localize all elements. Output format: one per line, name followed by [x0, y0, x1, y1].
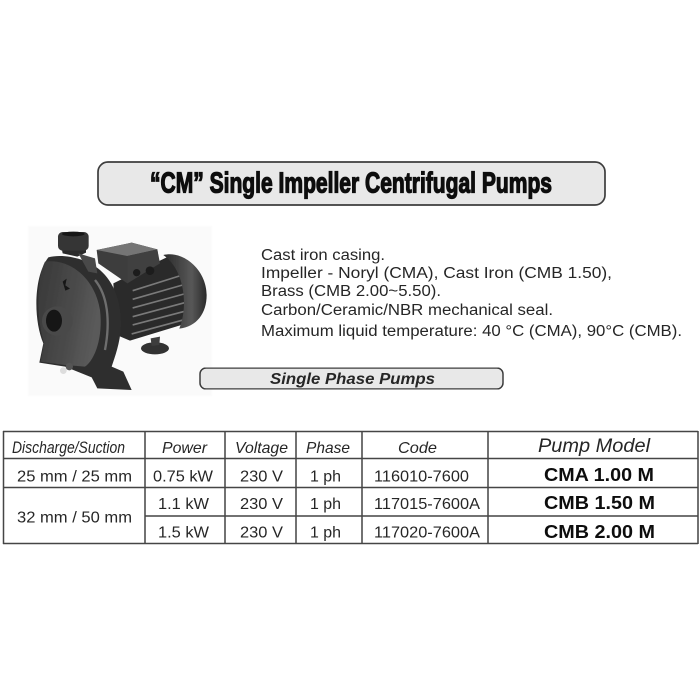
table header row: Voltage	[235, 440, 288, 457]
table header row: Pump Model	[538, 435, 651, 457]
row: CMB 2.00 M: 230 V	[240, 524, 283, 542]
title: “CM” Single Impeller Centrifugal Pumps	[150, 168, 552, 200]
row: CMB 2.00 M	[158, 522, 655, 542]
row: CMA 1.00 M: CMA 1.00 M	[544, 465, 654, 485]
row: CMA 1.00 M: 0.75 kW	[153, 468, 214, 486]
row: CMB 1.50 M: CMB 1.50 M	[544, 493, 655, 513]
row: CMB 1.50 M: 230 V	[240, 496, 283, 513]
feature list: Maximum liquid temperature: 40 °C (CMA), 90°C (CMB).	[261, 323, 682, 340]
motor foot	[141, 342, 169, 354]
row: CMB 2.00 M: 117020-7600A	[374, 524, 481, 542]
row: CMA 1.00 M: 230 V	[240, 468, 283, 486]
row: CMA 1.00 M: 25 mm / 25 mm	[17, 468, 132, 486]
table header row	[12, 435, 651, 457]
drain plug	[60, 367, 67, 374]
row: CMA 1.00 M	[17, 465, 654, 486]
table header row: Power	[162, 440, 208, 457]
logo mark	[63, 279, 70, 291]
row: CMB 2.00 M: 1 ph	[310, 524, 341, 542]
feature list	[261, 247, 682, 340]
row: CMB 2.00 M: CMB 2.00 M	[544, 522, 655, 542]
feature list: Carbon/Ceramic/NBR mechanical seal.	[261, 302, 553, 319]
table header row: Discharge/Suction	[12, 439, 125, 457]
feature list: Impeller - Noryl (CMA), Cast Iron (CMB 1.50),	[261, 265, 612, 282]
row: CMA 1.00 M: 116010-7600	[374, 468, 469, 486]
table header row: Phase	[306, 440, 350, 457]
table grid	[3, 431, 698, 544]
suction port	[42, 306, 73, 336]
motor fins	[132, 276, 185, 334]
pump photo	[28, 226, 212, 396]
row: CMB 1.50 M: 117015-7600A	[374, 496, 481, 513]
volute face	[38, 261, 101, 367]
motor end cap	[163, 254, 207, 329]
section banner: single phase pumps	[200, 368, 503, 389]
rim highlight	[95, 280, 108, 350]
row: CMB 1.50 M	[17, 493, 655, 526]
discharge port	[62, 248, 86, 257]
pump table	[3, 431, 698, 544]
row: CMA 1.00 M: 1 ph	[310, 468, 341, 486]
motor body	[113, 257, 188, 341]
row: CMB 1.50 M: 32 mm / 50 mm	[17, 510, 132, 526]
row: CMB 2.00 M: 1.5 kW	[158, 524, 210, 542]
table header row: Code	[398, 440, 437, 457]
volute outer rim	[36, 256, 132, 390]
row: CMB 1.50 M: 1.1 kW	[158, 496, 210, 513]
feature list: Cast iron casing.	[261, 247, 385, 264]
row: CMB 1.50 M: 1 ph	[310, 496, 341, 513]
title banner	[98, 162, 605, 205]
feature list: Brass (CMB 2.00~5.50).	[261, 283, 441, 300]
terminal box	[97, 243, 159, 283]
section banner: single phase pumps: Single Phase Pumps	[270, 371, 435, 388]
